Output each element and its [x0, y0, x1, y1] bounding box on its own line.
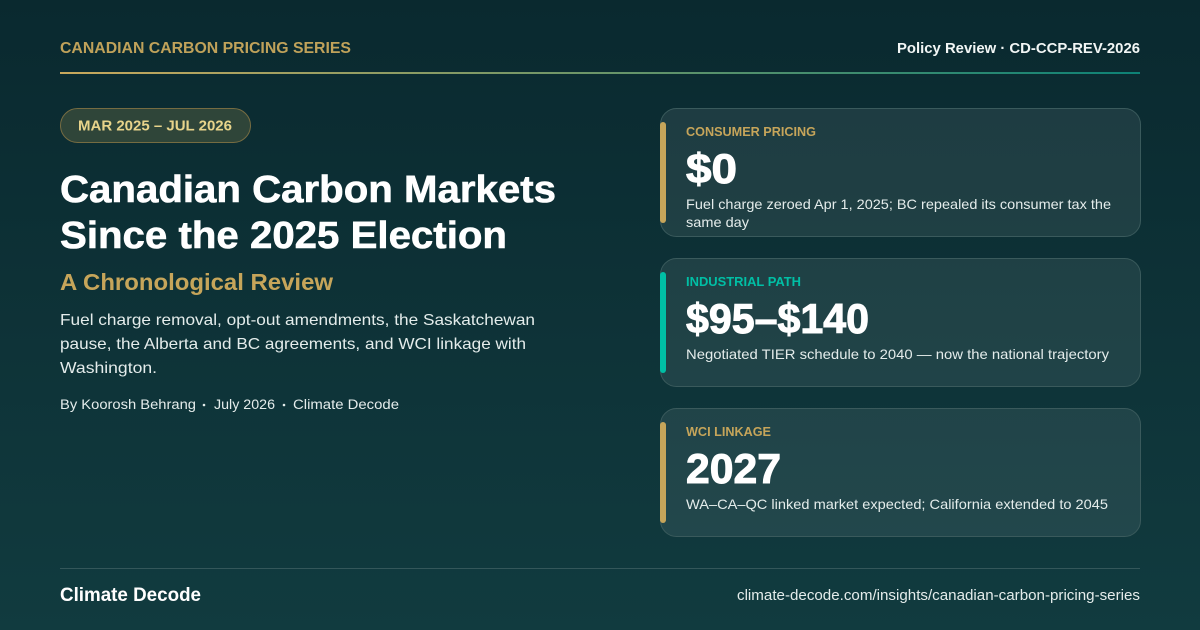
accent bar	[660, 272, 666, 373]
description: Fuel charge removal, opt-out amendments, the Saskatchewan	[60, 312, 535, 329]
byline: Climate Decode	[293, 397, 399, 412]
title	[60, 169, 556, 257]
description: Washington.	[60, 360, 157, 377]
footer brand: Climate Decode	[60, 585, 201, 606]
byline	[60, 397, 399, 412]
accent bar	[660, 122, 666, 223]
subtitle: A Chronological Review	[60, 269, 333, 295]
title: Canadian Carbon Markets	[60, 169, 556, 211]
card description	[686, 196, 1111, 230]
card: consumer pricing	[660, 108, 1140, 236]
footer url: climate-decode.com/insights/canadian-carbon-pricing-series	[737, 588, 1140, 604]
card value: 2027	[686, 445, 781, 492]
card: industrial path	[660, 258, 1140, 386]
card description: Fuel charge zeroed Apr 1, 2025; BC repealed its consumer tax the	[686, 196, 1111, 212]
card label: INDUSTRIAL PATH	[686, 275, 801, 289]
card value: $0	[686, 145, 737, 192]
series label: CANADIAN CARBON PRICING SERIES	[60, 40, 351, 57]
card description: Negotiated TIER schedule to 2040 — now the national trajectory	[686, 346, 1109, 362]
description: pause, the Alberta and BC agreements, and WCI linkage with	[60, 336, 526, 353]
footer	[60, 585, 1140, 606]
card description: same day	[686, 214, 749, 230]
byline: July 2026	[214, 397, 275, 412]
byline: By Koorosh Behrang	[60, 397, 196, 412]
description	[60, 312, 535, 377]
card: WCI linkage	[660, 408, 1140, 536]
card description: WA–CA–QC linked market expected; California extended to 2045	[686, 496, 1108, 512]
card value: $95–$140	[686, 295, 869, 342]
accent bar	[660, 422, 666, 523]
document reference: Policy Review · CD-CCP-REV-2026	[897, 41, 1140, 57]
date pill	[60, 108, 250, 142]
header	[60, 40, 1140, 57]
card label: WCI LINKAGE	[686, 425, 771, 439]
date pill: MAR 2025 – JUL 2026	[78, 118, 232, 134]
title: Since the 2025 Election	[60, 215, 507, 257]
card label: CONSUMER PRICING	[686, 125, 816, 139]
